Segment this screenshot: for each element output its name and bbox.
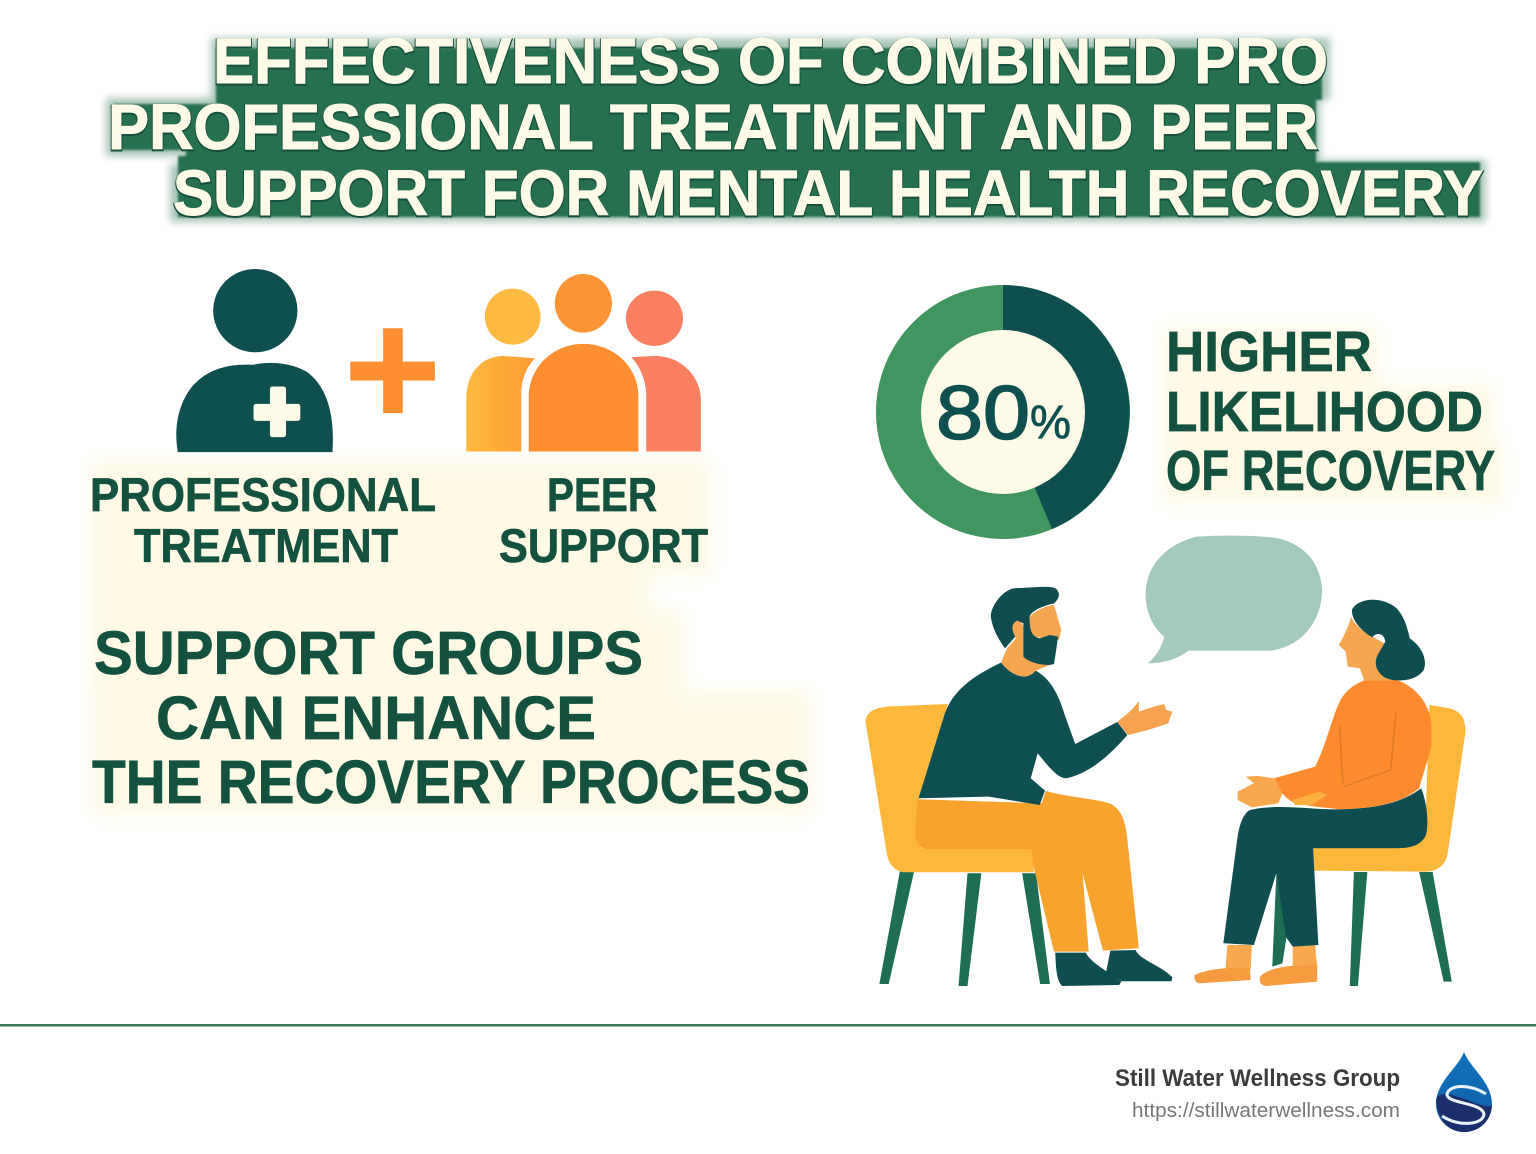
text block: support groups statement: CAN ENHANCE — [156, 684, 596, 752]
label: professional treatment — [90, 468, 436, 572]
donut chart: 80%: 80 — [936, 371, 1030, 456]
footer divider — [0, 1024, 1536, 1026]
illustration: two people in conversation — [866, 536, 1465, 986]
title banner: EFFECTIVENESS OF COMBINED PRO — [213, 25, 1328, 97]
text block: support groups statement: THE RECOVERY PROCESS — [92, 748, 810, 816]
title banner: PROFESSIONAL TREATMENT AND PEER — [108, 91, 1318, 163]
icon: peer support group — [466, 274, 701, 451]
icon: water drop logo — [1436, 1052, 1492, 1132]
text block: higher likelihood of recovery: HIGHER — [1166, 320, 1372, 384]
title banner: EFFECTIVENESS OF COMBINED PRO — [213, 26, 1328, 98]
man figure — [915, 587, 1172, 986]
label: peer support — [499, 468, 708, 572]
label: peer support: SUPPORT — [499, 519, 708, 572]
donut chart: 80% — [876, 285, 1130, 539]
label: professional treatment: PROFESSIONAL — [90, 468, 436, 521]
text block: support groups statement — [92, 619, 810, 816]
label: peer support: PEER — [547, 468, 657, 521]
footer brand name: Still Water Wellness Group — [1115, 1065, 1400, 1092]
label: professional treatment: TREATMENT — [134, 519, 398, 572]
icon: plus sign — [350, 328, 435, 413]
title banner — [106, 25, 1486, 230]
left chair — [866, 704, 1050, 986]
text block: higher likelihood of recovery: LIKELIHOOD — [1166, 380, 1483, 444]
cream highlight behind recovery label — [1162, 326, 1504, 504]
donut chart: 80%: % — [1030, 395, 1071, 448]
title banner: PROFESSIONAL TREATMENT AND PEER — [108, 92, 1318, 164]
icon: professional with medical cross — [176, 269, 333, 452]
text block: support groups statement: SUPPORT GROUPS — [94, 619, 643, 687]
cream highlight behind left labels — [90, 460, 812, 816]
text block: higher likelihood of recovery — [1166, 320, 1495, 503]
footer url: https://stillwaterwellness.com — [1132, 1100, 1400, 1122]
title banner: SUPPORT FOR MENTAL HEALTH RECOVERY — [173, 157, 1483, 229]
woman figure — [1194, 600, 1431, 986]
title banner: SUPPORT FOR MENTAL HEALTH RECOVERY — [173, 158, 1483, 230]
right chair — [1272, 705, 1465, 986]
speech bubble — [1146, 536, 1322, 663]
